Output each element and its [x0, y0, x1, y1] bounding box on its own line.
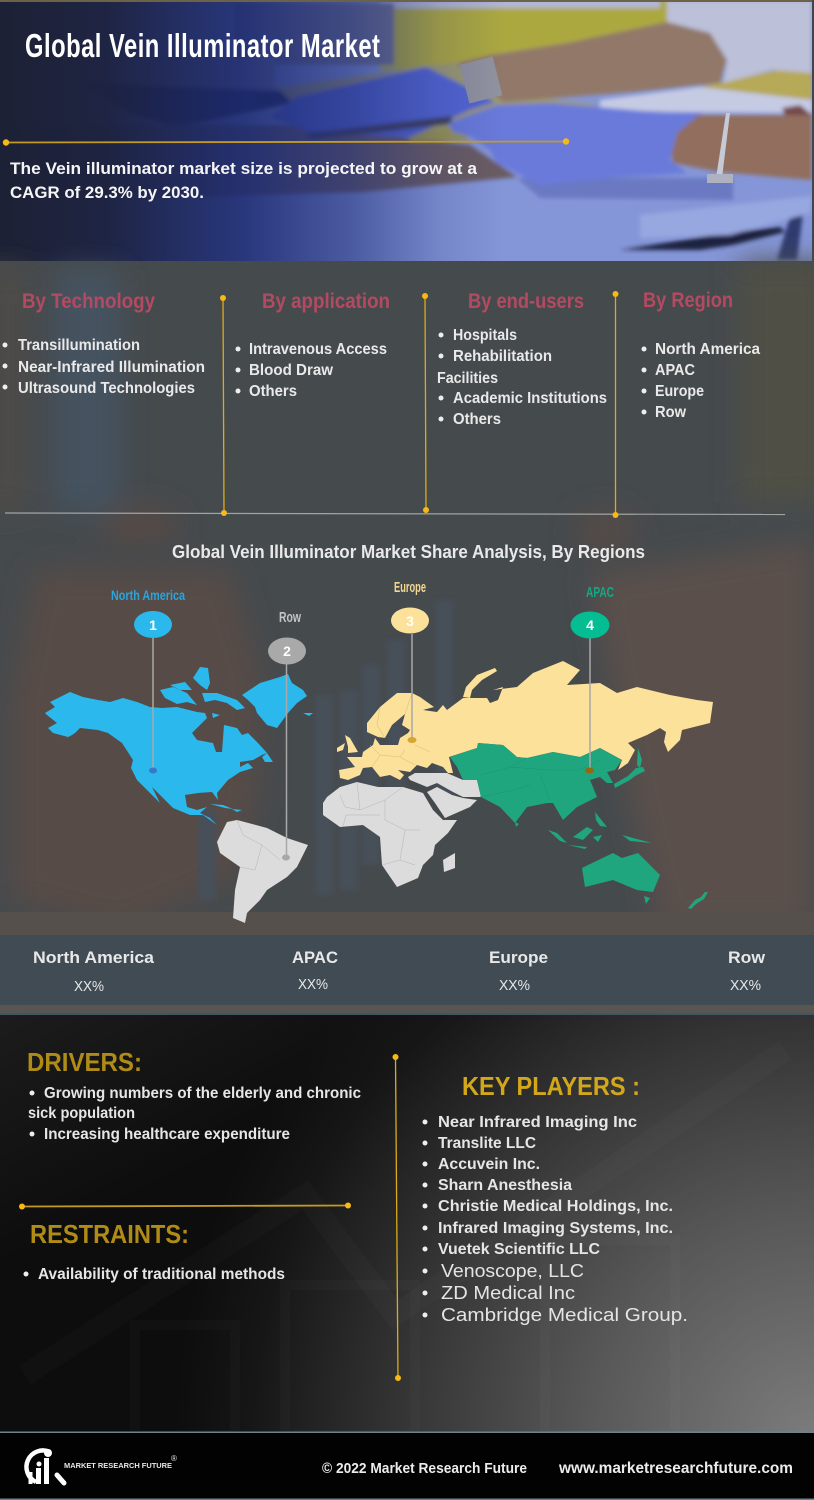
marker: Europe: 3 [406, 613, 414, 629]
region: Rest of world, Africa and Middle East [217, 773, 481, 923]
drivers list: Increasing healthcare expenditure [44, 1126, 290, 1143]
region: North America [45, 667, 313, 825]
marker: Row: Row [279, 609, 301, 626]
marker: North America [111, 587, 185, 774]
list [437, 327, 607, 428]
heading: restraints: RESTRAINTS: [30, 1219, 189, 1249]
panel: footer [0, 1432, 814, 1500]
world map [45, 661, 713, 923]
key players list: Vuetek Scientific LLC [438, 1241, 600, 1258]
regional share table: XX% [730, 977, 761, 994]
vertical divider [392, 1054, 401, 1381]
marker: Row: 2 [283, 643, 291, 659]
horizontal divider [19, 1202, 351, 1210]
panel: By end-users [437, 290, 607, 428]
list: Transillumination [18, 337, 140, 354]
brand name: MARKET RESEARCH FUTURE [64, 1463, 172, 1470]
panel: By Technology [2, 290, 205, 397]
drivers list: sick population [28, 1105, 135, 1122]
panel: By application [236, 290, 390, 400]
key players list: ZD Medical Inc [441, 1283, 575, 1303]
icon: company logo [26, 1449, 64, 1484]
regional share table [33, 948, 766, 995]
intro text: The Vein illuminator market size is projected to grow at a [10, 159, 478, 178]
list: Rehabilitation [453, 348, 552, 365]
drivers list [28, 1085, 361, 1143]
key players list: Sharn Anesthesia [438, 1177, 572, 1194]
list: Row [655, 404, 687, 421]
panel: drivers, restraints and key players [0, 1013, 814, 1435]
regional share table: XX% [298, 976, 328, 993]
regional share table: Europe [489, 948, 548, 967]
key players list: Accuvein Inc. [438, 1156, 540, 1173]
list [2, 337, 205, 397]
key players list: Venoscope, LLC [441, 1261, 584, 1281]
marker: North America: 1 [149, 617, 157, 633]
marker: North America: North America [111, 587, 185, 603]
copyright: © 2022 Market Research Future [322, 1460, 527, 1477]
intro text: CAGR of 29.3% by 2030. [10, 183, 204, 202]
list: Facilities [437, 370, 498, 387]
list: Europe [655, 383, 704, 400]
regional share table: XX% [74, 978, 104, 995]
map section heading: Global Vein Illuminator Market Share Analysis, By Regions [172, 542, 645, 562]
key players list: Near Infrared Imaging Inc [438, 1114, 637, 1131]
marker: Europe [391, 579, 429, 743]
restraints list: Availability of traditional methods [38, 1266, 285, 1283]
marker: Europe: Europe [394, 579, 426, 596]
list: APAC [655, 362, 695, 379]
region: Europe and Russia [337, 661, 713, 780]
heading: By application [262, 290, 390, 313]
heading: drivers: DRIVERS: [27, 1047, 142, 1077]
website: www.marketresearchfuture.com [558, 1460, 793, 1477]
list: Others [453, 411, 501, 428]
list: Near-Infrared Illumination [18, 359, 205, 376]
panel: segmentation and map background [0, 261, 814, 1015]
regional share table: Row [728, 948, 766, 967]
drivers list: Growing numbers of the elderly and chronic [44, 1085, 361, 1102]
registered mark: ® [171, 1454, 177, 1463]
heading: By Region [643, 289, 733, 312]
list [642, 341, 760, 421]
column dividers [5, 291, 785, 518]
marker: APAC: 4 [586, 617, 594, 633]
list: Hospitals [453, 327, 517, 344]
key players list: Translite LLC [438, 1135, 536, 1152]
panel: header photo banner [0, 0, 814, 261]
region: APAC [450, 743, 708, 909]
marker: APAC: APAC [586, 584, 614, 601]
list: North America [655, 341, 760, 358]
marker: Row [268, 609, 306, 860]
title: Global Vein Illuminator Market [25, 28, 380, 65]
intro text [10, 159, 478, 202]
regional share table: APAC [292, 948, 338, 967]
list [236, 341, 387, 400]
panel: By Region [642, 289, 760, 421]
heading: key players: KEY PLAYERS : [462, 1071, 640, 1101]
list: Academic Institutions [453, 390, 607, 407]
list: Blood Draw [249, 362, 334, 379]
key players list: Cambridge Medical Group. [441, 1305, 688, 1325]
list: Ultrasound Technologies [18, 380, 195, 397]
key players list: Christie Medical Holdings, Inc. [438, 1198, 673, 1215]
list: Others [249, 383, 297, 400]
divider with gold end dots [3, 138, 569, 146]
regional share table: XX% [499, 977, 530, 994]
heading: By Technology [22, 290, 155, 313]
list: Intravenous Access [249, 341, 387, 358]
heading: By end-users [468, 290, 584, 313]
regional share table: North America [33, 948, 155, 967]
key players list: Infrared Imaging Systems, Inc. [438, 1220, 673, 1237]
marker: APAC [570, 584, 614, 774]
key players list [422, 1114, 688, 1325]
